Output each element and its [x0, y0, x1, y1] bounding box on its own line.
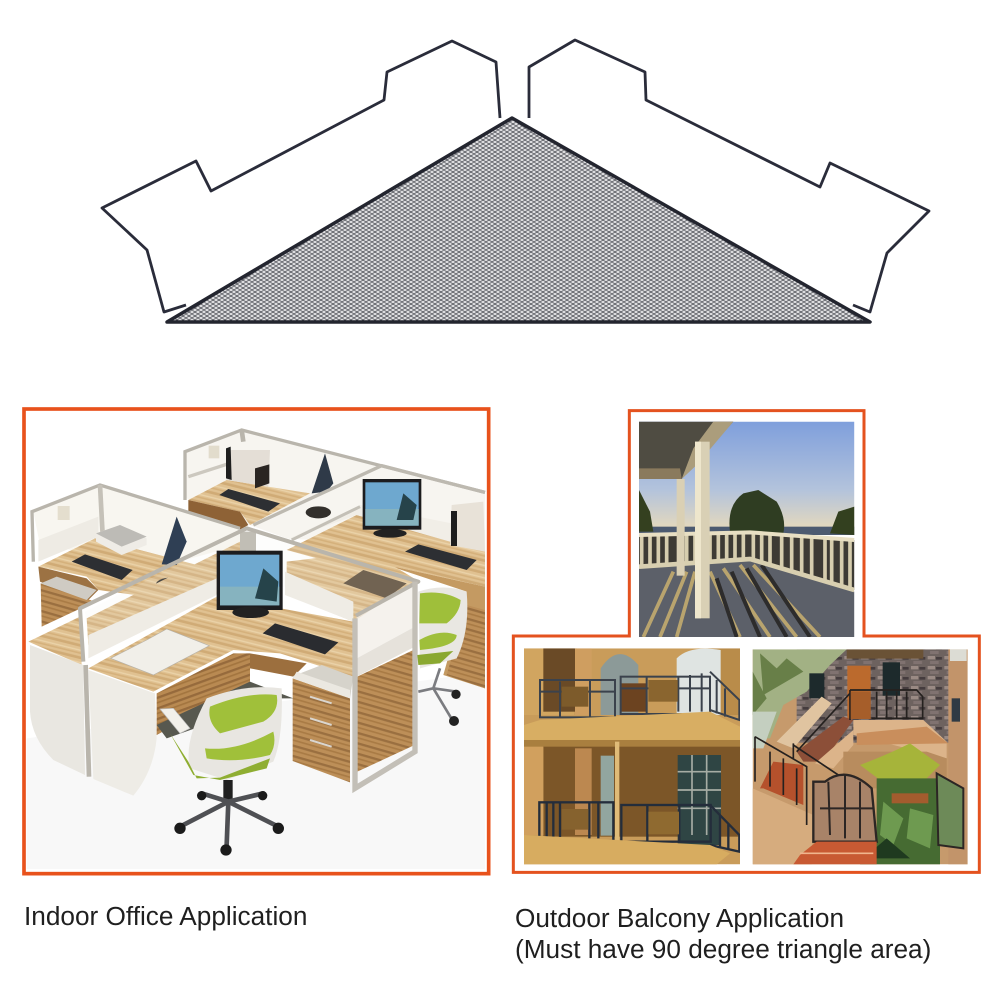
upper slab	[524, 712, 740, 745]
photo: seaside deck	[639, 422, 854, 637]
deck shadow stripes	[643, 565, 820, 637]
left back cubicle	[32, 485, 256, 627]
icon: keyboard	[263, 623, 338, 654]
mesh shelf surface	[167, 118, 870, 322]
left wire bracket	[102, 41, 500, 312]
upper balcony rail	[540, 672, 739, 720]
icon: front monitor	[217, 551, 283, 618]
desk under panel	[157, 653, 250, 735]
windows	[601, 654, 638, 715]
railing	[639, 532, 854, 590]
desk surface	[28, 617, 82, 665]
balcony frame	[513, 411, 979, 872]
chair front	[160, 687, 284, 856]
iron railings	[755, 690, 923, 825]
trees	[729, 490, 784, 533]
white end panels	[30, 645, 85, 775]
brick steps	[793, 842, 877, 864]
desk partition	[85, 530, 417, 645]
sea	[639, 527, 854, 535]
product: triangular corner mesh shelf	[102, 40, 929, 322]
drawer unit	[292, 665, 353, 698]
lower storey	[543, 747, 740, 837]
right back desk	[253, 466, 485, 688]
roof	[639, 422, 733, 479]
photo: apartment balconies	[524, 648, 740, 864]
iron gate	[813, 775, 877, 842]
caption: indoor office: Indoor Office Application	[24, 901, 307, 931]
side panel	[357, 650, 413, 772]
photo: garden staircase house	[752, 649, 968, 864]
panel: outdoor balcony photos	[513, 411, 979, 872]
stone wall	[797, 649, 950, 743]
columns	[677, 479, 685, 576]
stairs	[797, 717, 853, 762]
open book	[111, 629, 209, 675]
deck floor	[639, 558, 854, 637]
icon: back monitor	[363, 479, 421, 538]
caption: outdoor balcony: (Must have 90 degree triangle area)	[515, 934, 931, 964]
door	[847, 666, 871, 719]
foliage top-left	[753, 649, 847, 738]
panel: indoor office photo	[24, 409, 489, 874]
right wire bracket	[529, 40, 929, 312]
caption: outdoor balcony: Outdoor Balcony Application	[515, 903, 844, 933]
floor	[27, 672, 485, 869]
wood seen through glass	[87, 542, 240, 645]
caption: outdoor balcony	[515, 903, 931, 964]
lower balcony rail	[539, 802, 739, 852]
back cubicle	[185, 430, 485, 552]
office frame	[24, 409, 489, 874]
lower slab	[524, 835, 730, 864]
chair back right	[417, 587, 467, 726]
garden plants	[860, 743, 940, 782]
front desk	[28, 528, 418, 796]
landing	[853, 720, 947, 758]
